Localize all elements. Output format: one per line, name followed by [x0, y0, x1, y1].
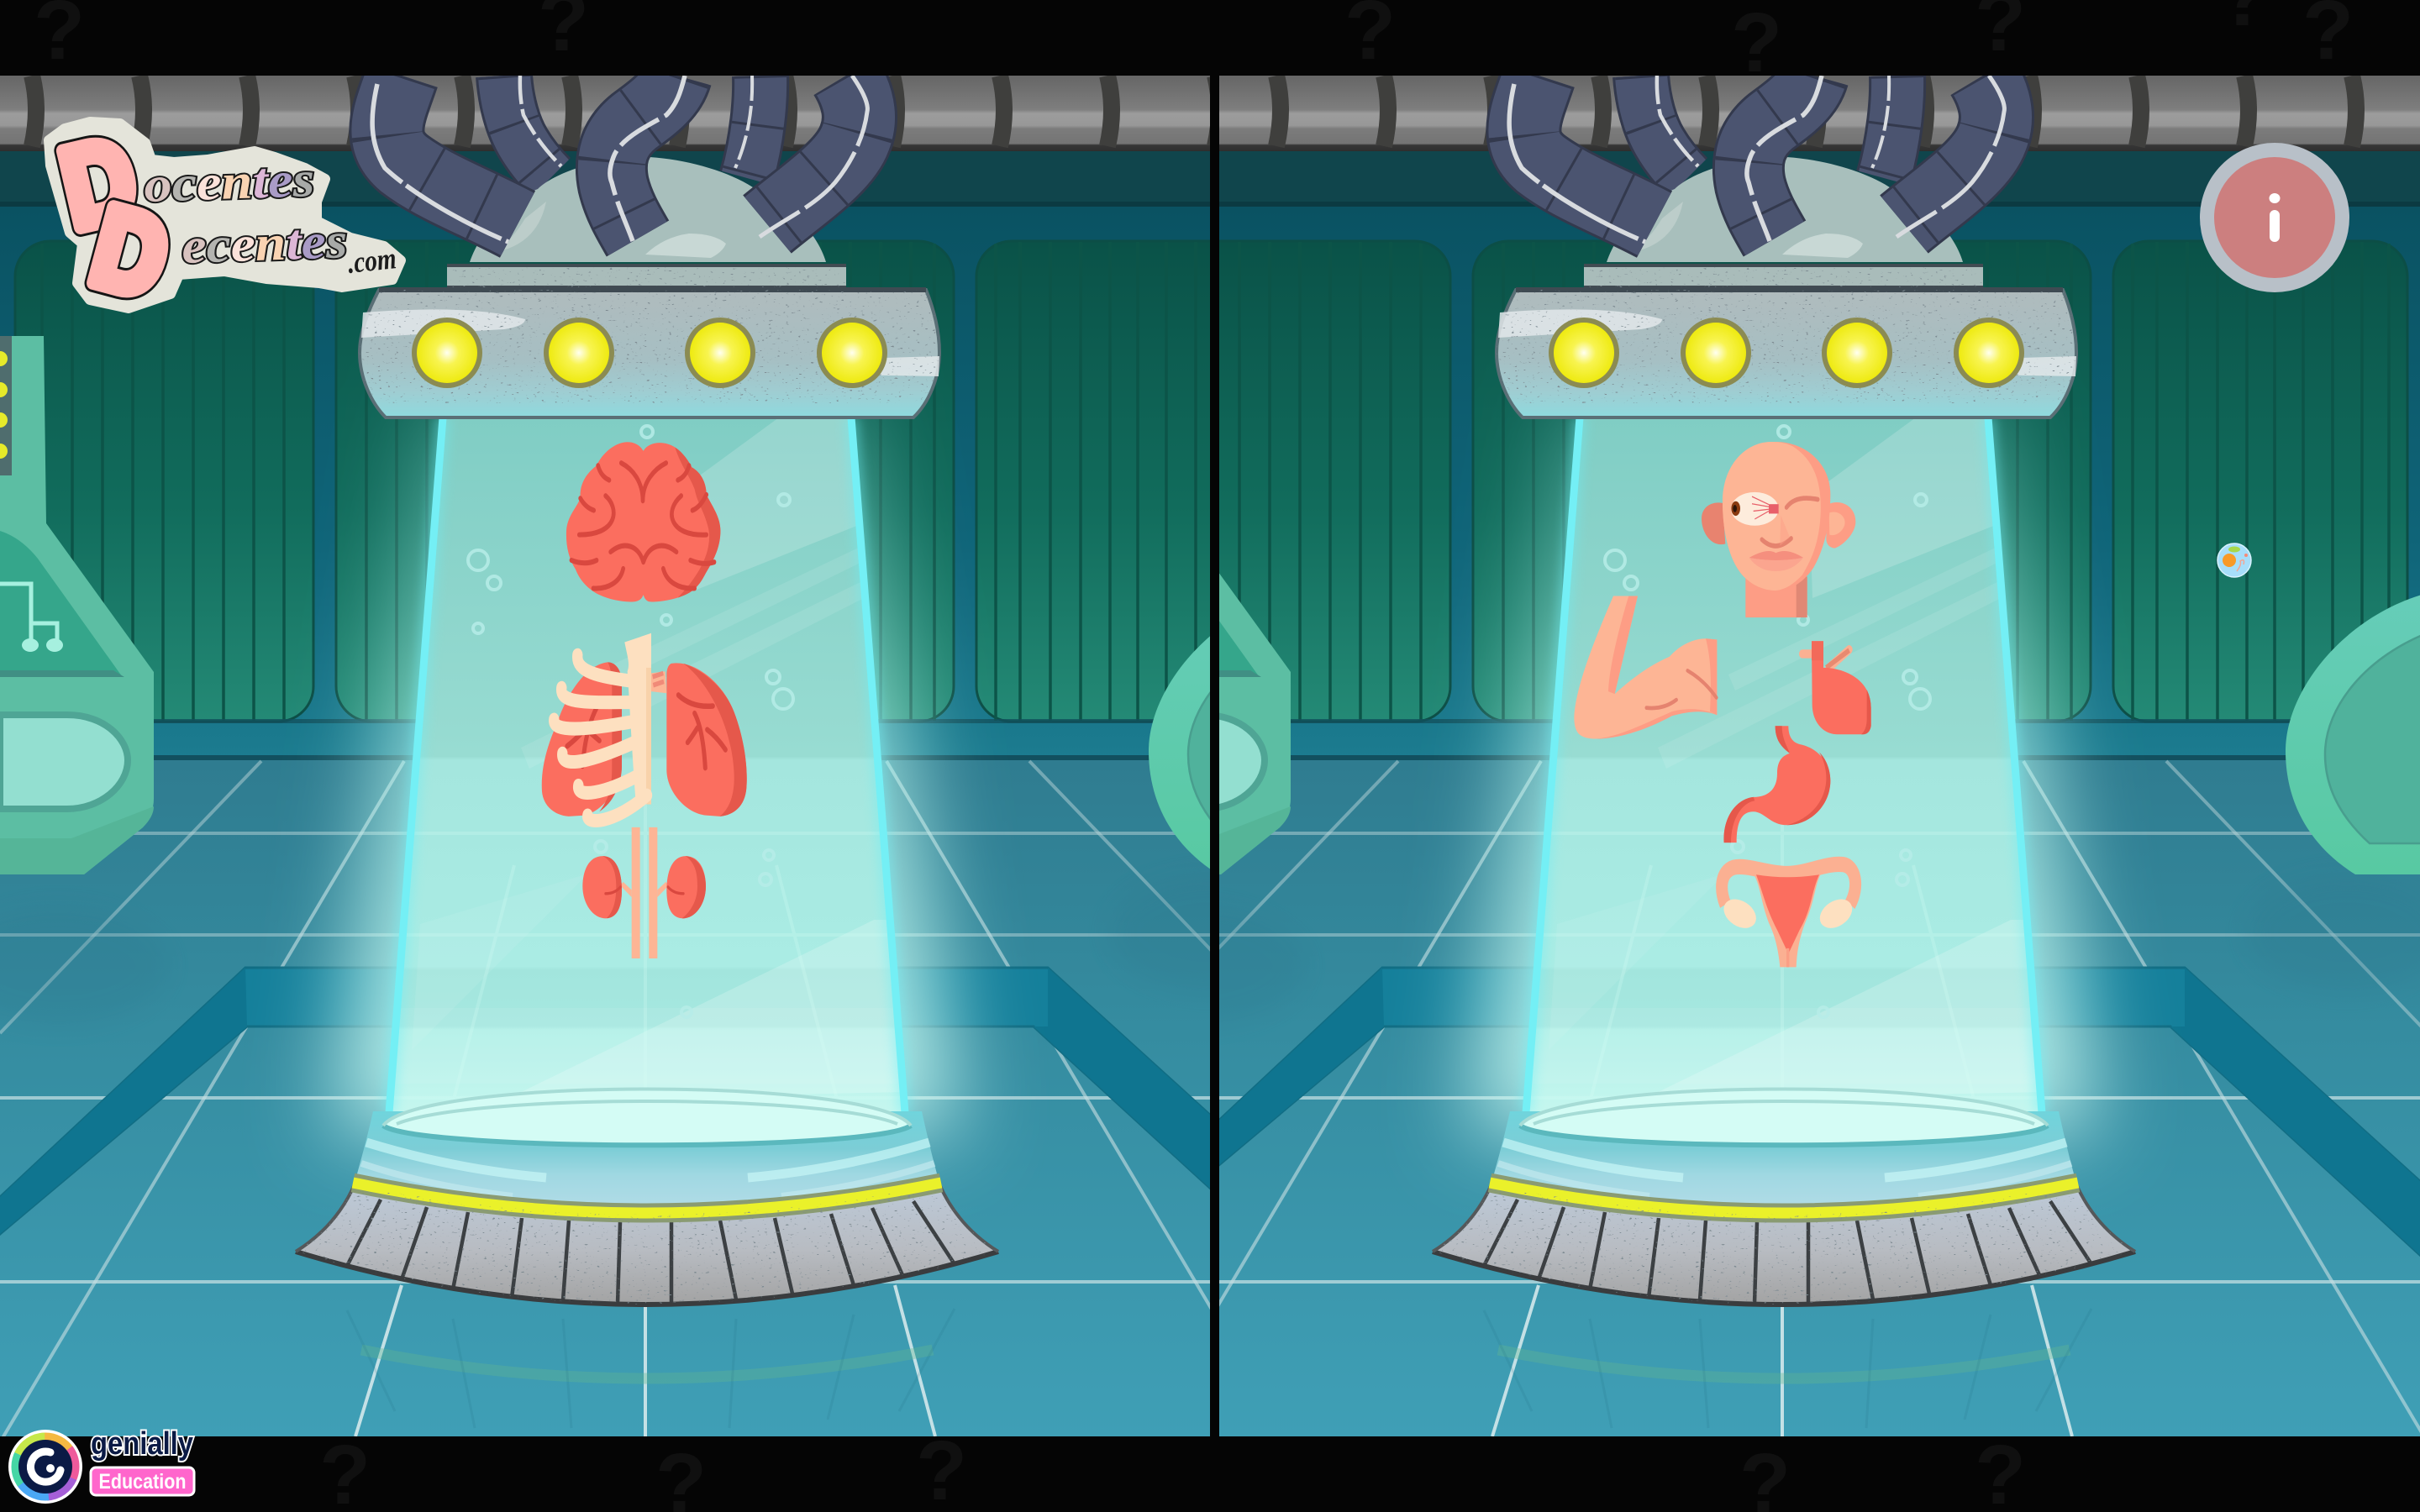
- left dome: [447, 157, 846, 288]
- left tube glow: [333, 395, 958, 1134]
- organs: left tube: [542, 442, 747, 958]
- icon: small cell: [2217, 543, 2251, 577]
- panel: left laboratory scene: [0, 76, 1210, 1436]
- left round capsule machine: [1149, 592, 1294, 874]
- left floor: [0, 760, 1311, 1448]
- right rear hoses: [1641, 76, 1897, 178]
- right glass tube: [1526, 417, 2042, 1127]
- left metal specks: [286, 260, 1008, 1306]
- right metal specks: [1423, 260, 2145, 1306]
- icon: rib cage: [554, 633, 651, 821]
- logo: Docentes Decentes: D: [50, 113, 147, 253]
- logo: Docentes Decentes: .com: [346, 241, 398, 280]
- left front hoses: [372, 76, 867, 242]
- right round capsule machine: [2286, 592, 2420, 874]
- icon: stomach: [1724, 726, 1830, 843]
- icon: head with eye: [1702, 442, 1855, 617]
- icon: brain: [566, 442, 720, 601]
- logo: Docentes Decentes: ocentes: [143, 151, 315, 213]
- right wall and ceiling: [1137, 76, 2420, 761]
- logo: Docentes Decentes: D: [80, 182, 181, 323]
- logo: Docentes Decentes: [49, 113, 401, 323]
- left tube base: [296, 1089, 998, 1305]
- organs: right tube: [1574, 442, 1871, 967]
- icon: flexed arm: [1574, 596, 1717, 738]
- left lamp ring: [360, 290, 939, 417]
- left console machine: [0, 336, 154, 874]
- panel: right laboratory scene: [1219, 76, 2420, 1436]
- left yellow lamps: [412, 318, 887, 388]
- logo: Docentes Decentes: D: [80, 182, 181, 323]
- icon: heart: [1802, 641, 1871, 734]
- left rear hoses: [504, 76, 760, 178]
- right console machine: [1129, 336, 1291, 874]
- left glass tube: [389, 417, 905, 1127]
- logo: genially Education: genially: [91, 1426, 193, 1462]
- logo: genially Education: [8, 1426, 194, 1504]
- right tube base: [1433, 1089, 2135, 1305]
- icon: uterus: [1721, 864, 1855, 967]
- right yellow lamps: [1549, 318, 2024, 388]
- logo: genially Education: Education: [99, 1470, 187, 1494]
- right floor: [1086, 760, 2420, 1448]
- icon: lungs: [542, 662, 747, 816]
- info button: [2200, 143, 2349, 292]
- logo: Docentes Decentes: ecentes: [181, 213, 348, 274]
- right tube glow: [1470, 395, 2095, 1134]
- right dome: [1584, 157, 1983, 288]
- left wall and ceiling: [0, 76, 1294, 761]
- icon: kidneys: [582, 827, 706, 958]
- logo: Docentes Decentes: D: [50, 113, 147, 253]
- right front hoses: [1509, 76, 2004, 242]
- right lamp ring: [1497, 290, 2076, 417]
